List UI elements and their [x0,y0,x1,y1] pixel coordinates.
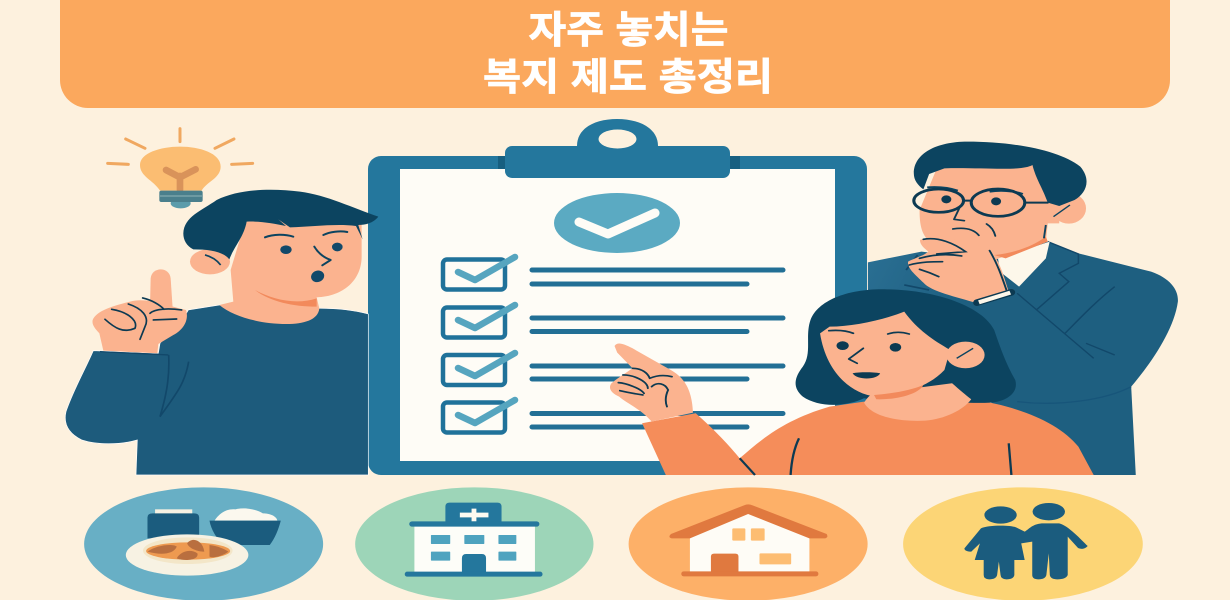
pointing hand [610,343,693,422]
checklist item 3 [443,353,783,385]
person: thinking man in a suit [868,142,1178,475]
clipboard clip [505,119,730,178]
checklist item 4 [443,400,783,432]
hair and head [796,289,1016,421]
icon: large check badge [554,193,680,253]
icon: meal [84,487,323,600]
title: 복지 제도 총정리 [483,57,773,99]
raised hand [92,269,187,353]
person: man raising a finger [65,190,378,475]
icon: hospital [355,487,593,600]
head [183,190,378,324]
icon: couple [903,487,1143,600]
icon: house [629,487,868,600]
hand on chin [908,237,1011,303]
checklist item 2 [443,305,783,338]
shirt collar [998,242,1050,287]
sweater [65,305,368,475]
icon: light bulb [108,129,253,208]
suit [868,242,1178,475]
person: woman pointing at the checklist [610,289,1094,475]
head [914,142,1087,260]
title [483,10,773,99]
sweater [642,399,1094,475]
clipboard [368,119,867,475]
title banner [60,0,1170,108]
checklist item 1 [443,257,783,290]
title: 자주 놓치는 [528,10,728,52]
